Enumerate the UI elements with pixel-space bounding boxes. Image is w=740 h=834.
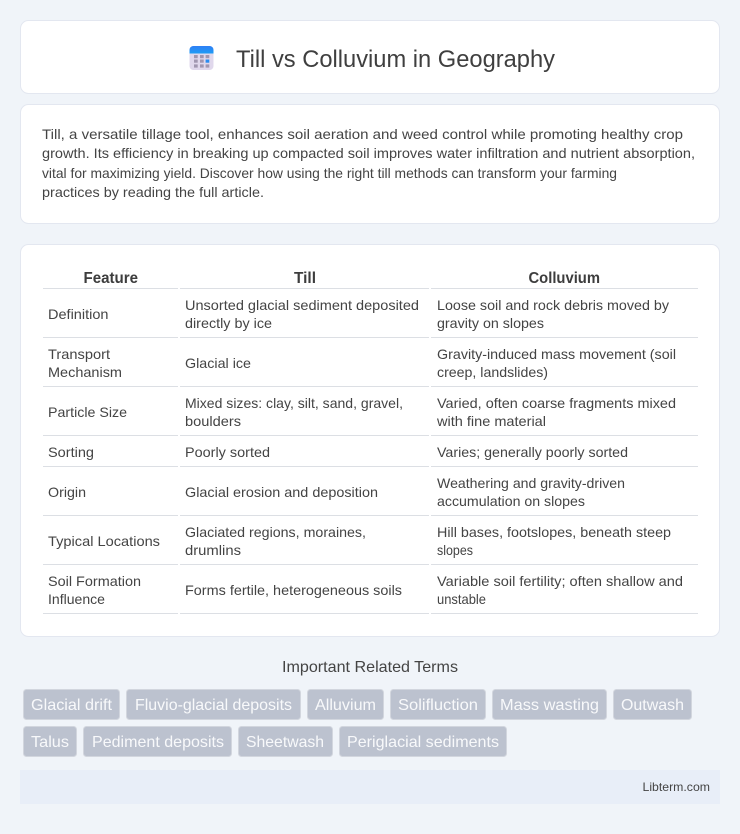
- table row: sorting: Sorting: [48, 444, 94, 460]
- tags: related terms: Periglacial sediments: [347, 734, 499, 751]
- table row: soil formation influence: [48, 573, 683, 607]
- tags: related terms: Glacial drift: [31, 697, 113, 714]
- table row: typical locations: Hill bases, footslopes, beneath steep: [437, 524, 671, 540]
- table header: Till: [294, 270, 316, 287]
- title: Till vs Colluvium in Geography: [236, 46, 555, 73]
- table row: transport mechanism: Mechanism: [48, 364, 122, 380]
- table row: origin: Weathering and gravity-driven: [437, 475, 625, 491]
- panel: introduction: [20, 104, 720, 224]
- table row: transport mechanism: Transport: [48, 346, 110, 362]
- table row: definition: Loose soil and rock debris moved by: [437, 297, 669, 313]
- table row: typical locations: slopes: [437, 542, 473, 558]
- tags: related terms: Fluvio-glacial deposits: [135, 697, 292, 714]
- table row: typical locations: drumlins: [185, 542, 241, 558]
- table row: definition: [48, 297, 669, 331]
- table row: definition: gravity on slopes: [437, 315, 544, 331]
- icon: calendar: [190, 46, 214, 70]
- table row: sorting: [48, 444, 628, 460]
- text block: introduction: growth. Its efficiency in breaking up compacted soil improves water infiltration and nutrient absorption,: [42, 145, 695, 161]
- table row: origin: accumulation on slopes: [437, 493, 585, 509]
- table row: particle size: [48, 395, 676, 429]
- table row: transport mechanism: Glacial ice: [185, 355, 251, 371]
- table row: soil formation influence: Variable soil fertility; often shallow and: [437, 573, 683, 589]
- table row: particle size: Particle Size: [48, 404, 127, 420]
- text block: introduction: vital for maximizing yield. Discover how using the right till methods can transform your farming: [42, 165, 617, 181]
- heading: important related terms: Important Related Terms: [282, 659, 458, 676]
- text block: introduction: practices by reading the full article.: [42, 184, 264, 200]
- table row: particle size: Varied, often coarse fragments mixed: [437, 395, 676, 411]
- tags: related terms: [24, 690, 692, 756]
- table row: soil formation influence: Forms fertile, heterogeneous soils: [185, 582, 402, 598]
- table row: origin: Origin: [48, 484, 86, 500]
- table row: transport mechanism: Gravity-induced mass movement (soil: [437, 346, 676, 362]
- table row: transport mechanism: creep, landslides): [437, 364, 548, 380]
- tags: related terms: Sheetwash: [246, 734, 324, 751]
- table row: origin: [48, 475, 625, 509]
- table header: Feature: [84, 270, 138, 287]
- panel: comparison table: [20, 244, 720, 636]
- table header: Colluvium: [528, 270, 600, 287]
- table row: sorting: Poorly sorted: [185, 444, 270, 460]
- text block: introduction: [42, 126, 695, 200]
- table header: [84, 270, 600, 287]
- table row: typical locations: Glaciated regions, moraines,: [185, 524, 366, 540]
- panel: header: [20, 20, 720, 94]
- tags: related terms: Talus: [31, 734, 69, 751]
- table row: typical locations: Typical Locations: [48, 533, 160, 549]
- text block: introduction: Till, a versatile tillage tool, enhances soil aeration and weed control while promoting healthy crop: [42, 126, 683, 142]
- tags: related terms: Mass wasting: [500, 697, 599, 714]
- table row: soil formation influence: Influence: [48, 591, 105, 607]
- table row: particle size: boulders: [185, 413, 241, 429]
- footer: Libterm.com: [642, 780, 710, 794]
- tags: related terms: Alluvium: [315, 697, 376, 714]
- table row: sorting: Varies; generally poorly sorted: [437, 444, 628, 460]
- tags: related terms: Pediment deposits: [92, 734, 224, 751]
- table row: particle size: with fine material: [436, 413, 546, 429]
- table row: typical locations: [48, 524, 671, 558]
- table row: origin: Glacial erosion and deposition: [185, 484, 378, 500]
- table row: soil formation influence: Soil Formation: [48, 573, 141, 589]
- tags: related terms: Solifluction: [398, 697, 478, 714]
- table row: particle size: Mixed sizes: clay, silt, sand, gravel,: [185, 395, 403, 411]
- table row: soil formation influence: unstable: [437, 591, 486, 607]
- tags: related terms: Outwash: [621, 697, 684, 714]
- table row: definition: directly by ice: [185, 315, 272, 331]
- table row: transport mechanism: [48, 346, 676, 380]
- table row: definition: Definition: [48, 306, 108, 322]
- table row: definition: Unsorted glacial sediment deposited: [185, 297, 419, 313]
- footer: [20, 770, 720, 804]
